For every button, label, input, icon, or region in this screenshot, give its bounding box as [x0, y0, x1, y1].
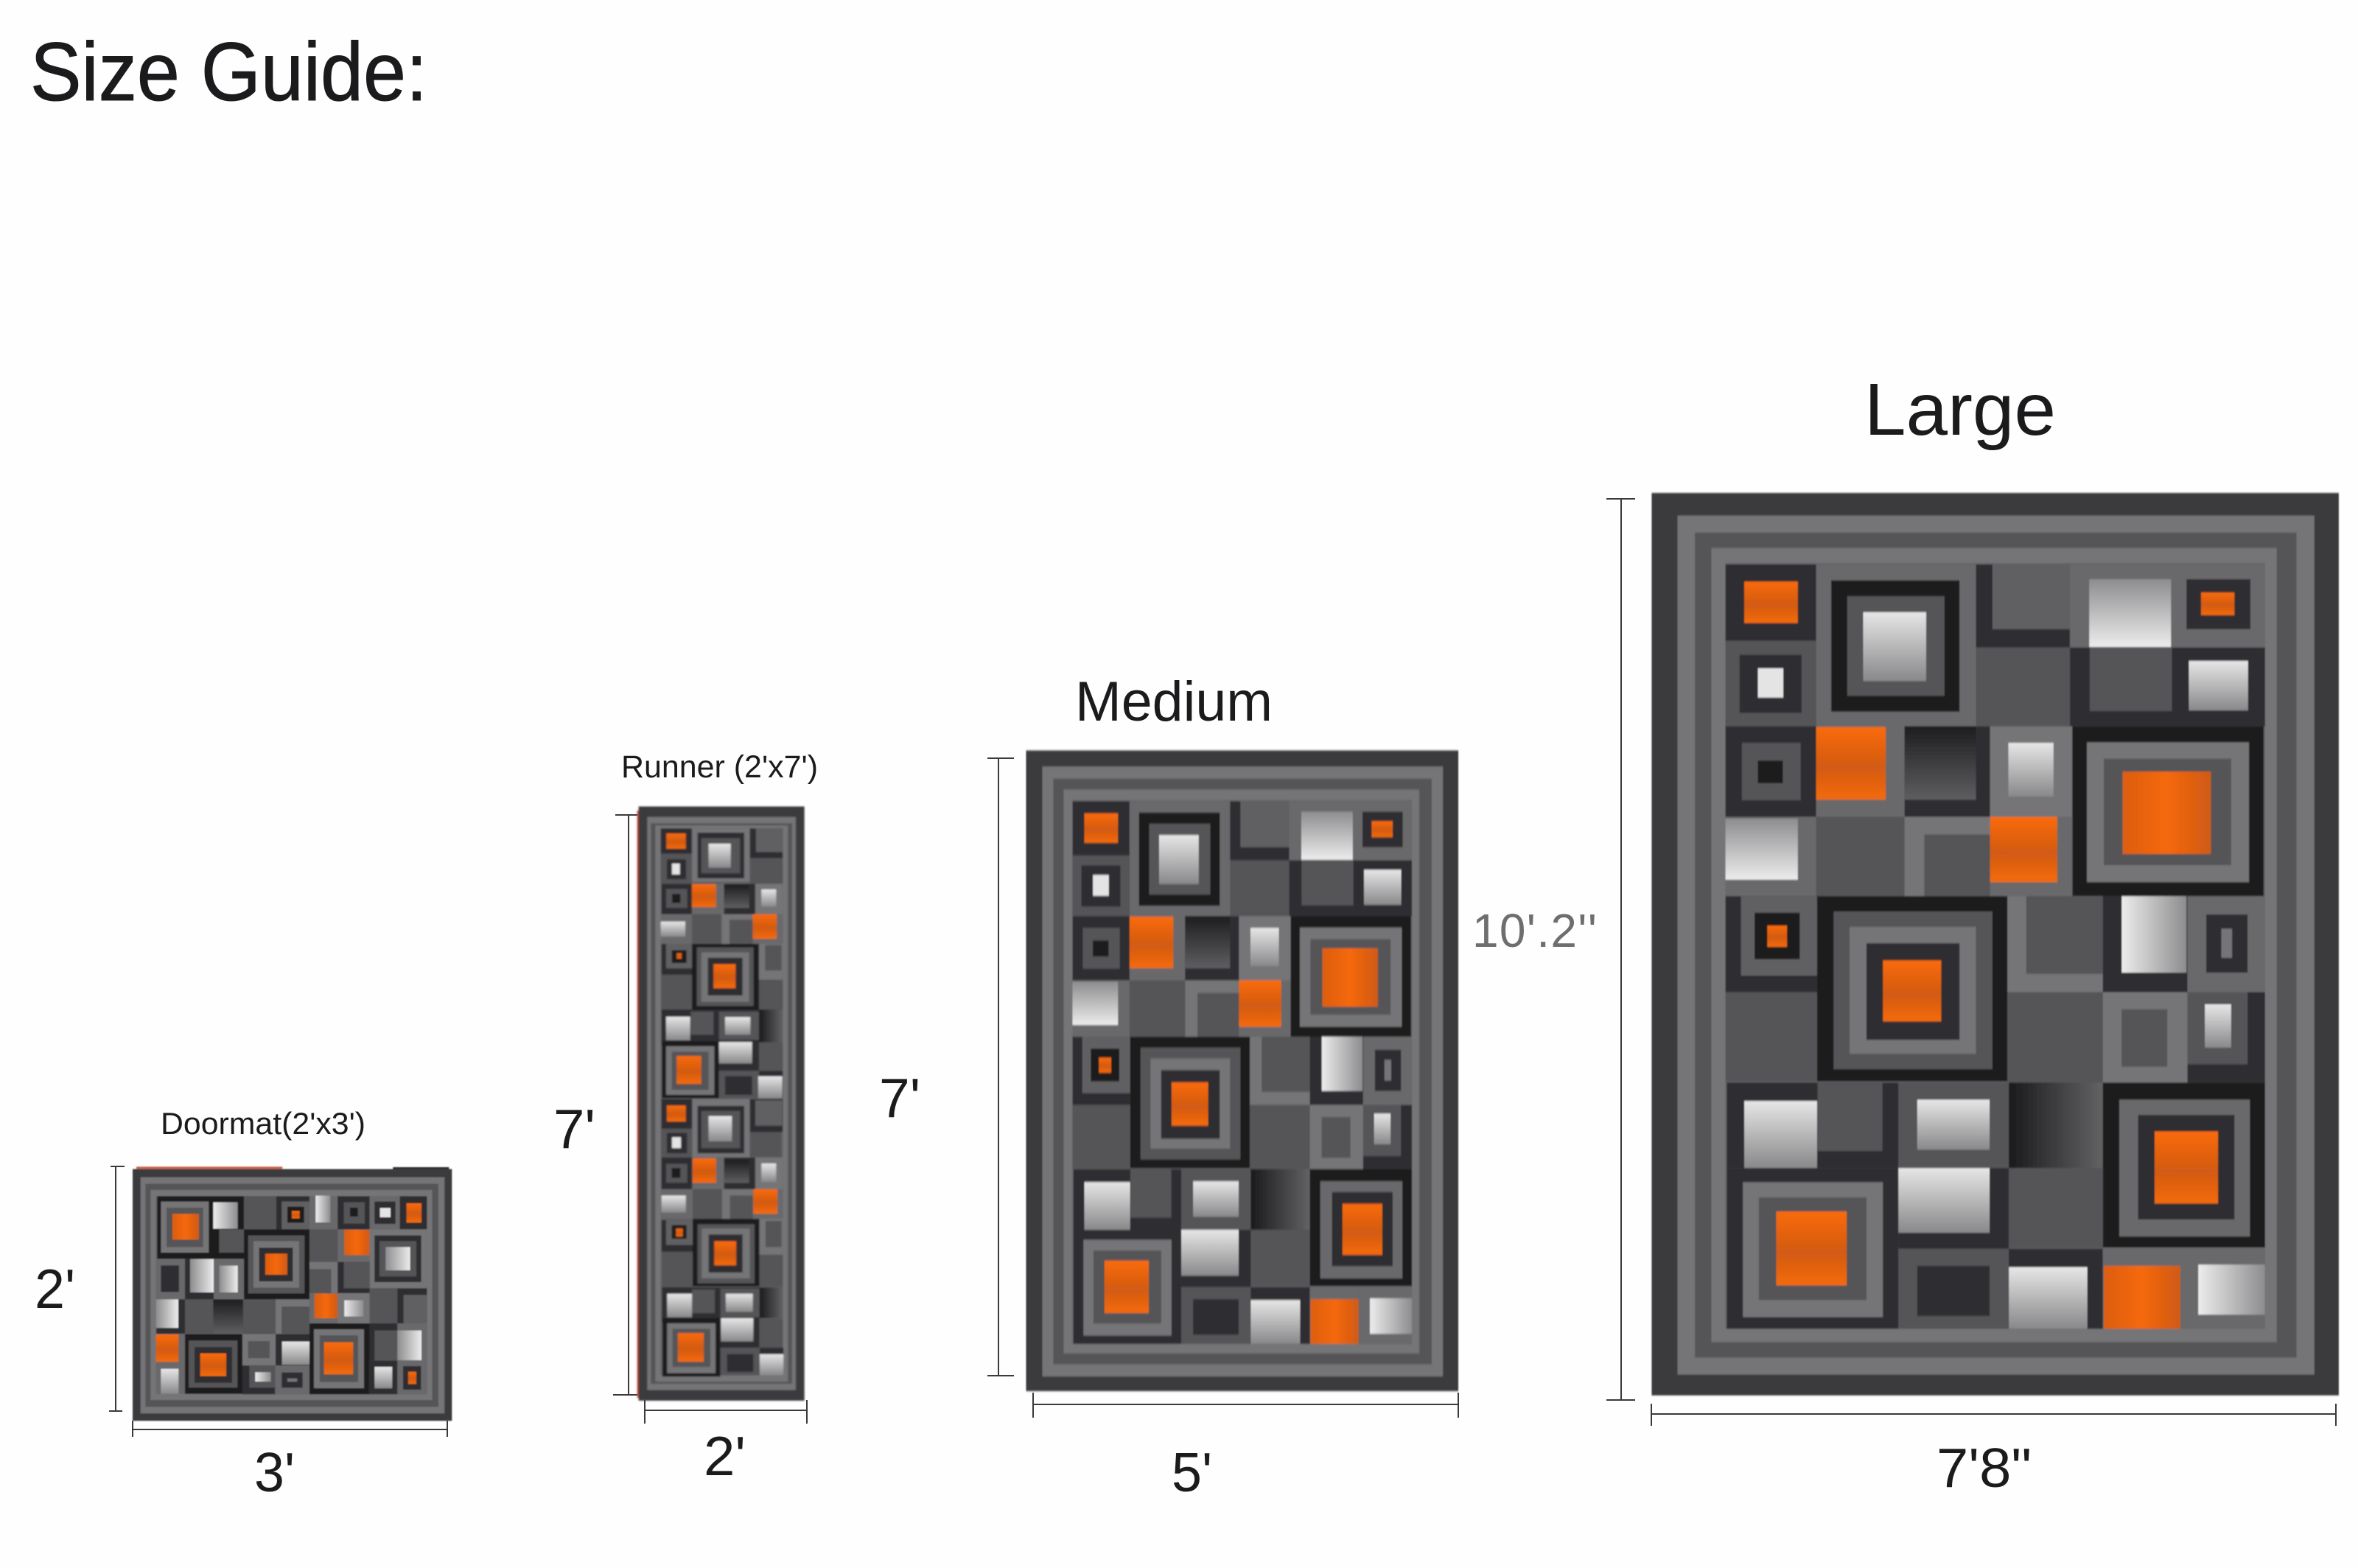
label: medium width: 5'	[1172, 1441, 1212, 1503]
label: Large: Large	[1864, 368, 2056, 451]
dimension line: doormat height	[109, 1166, 125, 1411]
label: large width: 7'8"	[1937, 1437, 2032, 1499]
label: medium height: 7'	[879, 1067, 920, 1129]
label: Medium: Medium	[1075, 671, 1273, 733]
label: runner height: 7'	[553, 1098, 595, 1160]
dimension line: medium height	[987, 758, 1014, 1376]
title: Size Guide:	[30, 26, 427, 118]
rug: doormat	[133, 1166, 452, 1421]
dimension line: runner height	[613, 815, 637, 1395]
label: large height: 10'.2''	[1472, 904, 1597, 957]
dimension line: large width	[1651, 1404, 2336, 1426]
rug: runner	[637, 806, 805, 1401]
dimension line: medium width	[1033, 1393, 1458, 1418]
label: Doormat: Doormat(2'x3')	[161, 1106, 365, 1141]
rug: medium	[1026, 751, 1458, 1391]
label: doormat width: 3'	[254, 1441, 295, 1503]
label: doormat height: 2'	[35, 1258, 75, 1320]
rug: large	[1651, 493, 2339, 1396]
dimension line: large height	[1606, 499, 1635, 1400]
label: Runner: Runner (2'x7')	[621, 749, 818, 785]
dimension line: doormat width	[133, 1421, 447, 1437]
dimension line: runner width	[645, 1400, 807, 1424]
label: runner width: 2'	[704, 1425, 746, 1487]
